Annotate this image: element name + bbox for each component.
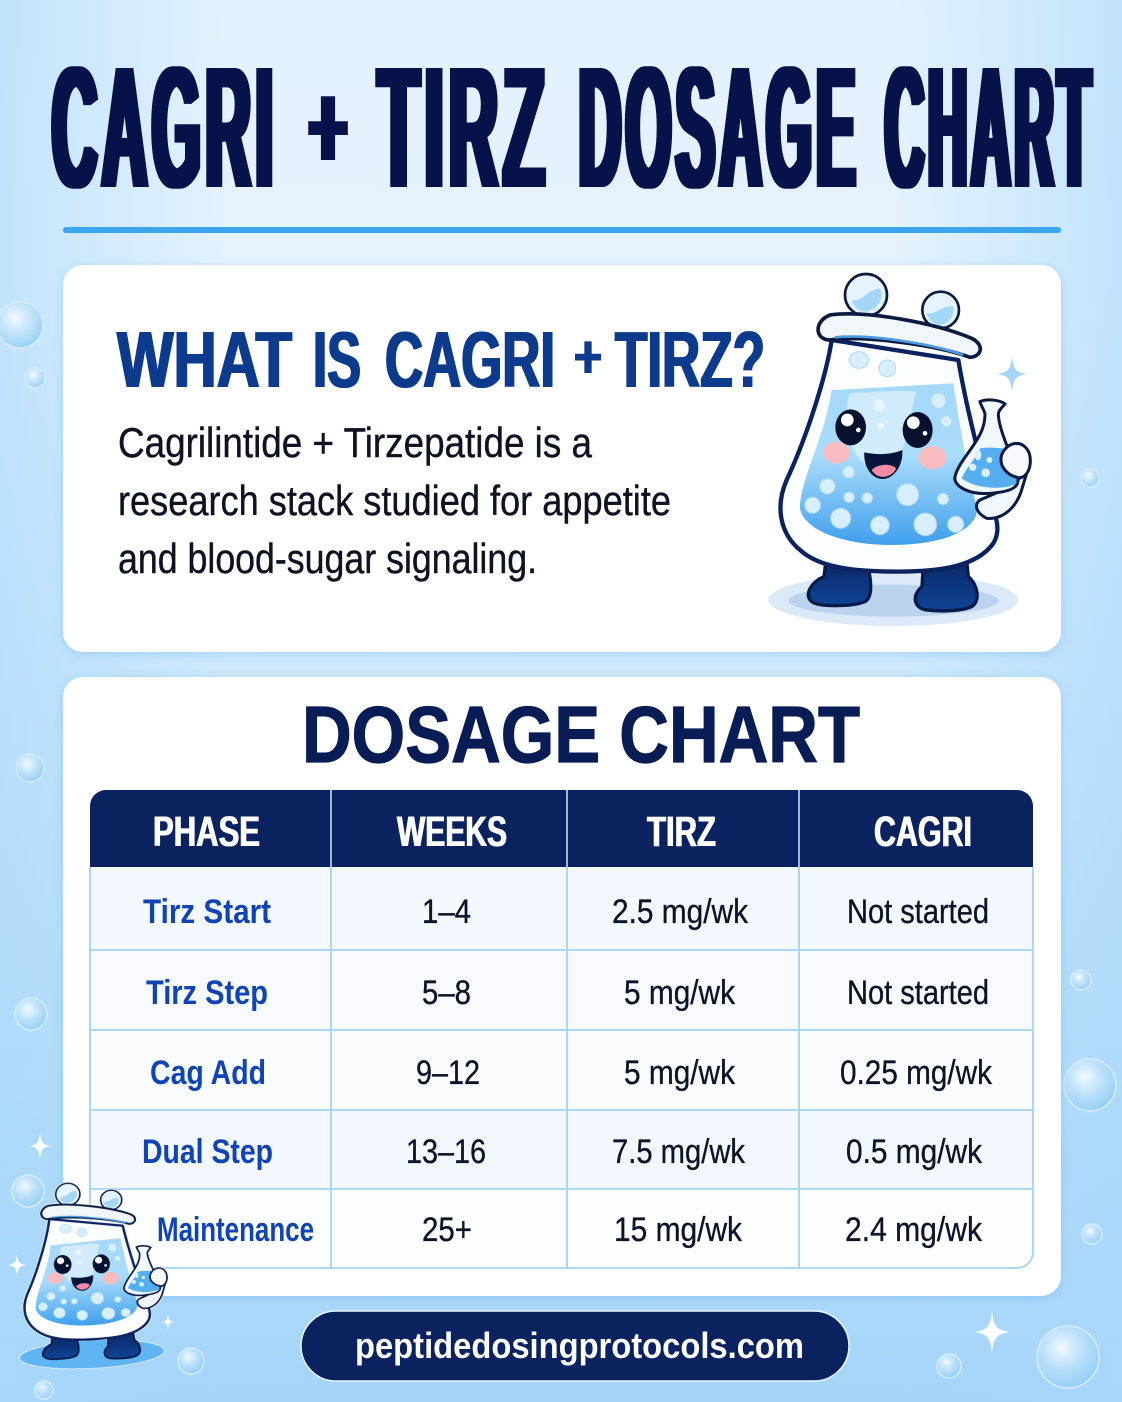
title: TIRZ (378, 30, 550, 224)
row: tirz step: Tirz Step (146, 974, 268, 1012)
heading: what is: + (574, 323, 602, 392)
description text: Cagrilintide + Tirzepatide is a (118, 419, 593, 466)
table rows (90, 867, 1033, 1268)
table header (90, 790, 1033, 867)
title (52, 30, 1095, 224)
heading: what is: WHAT (117, 315, 292, 404)
heading: what is: TIRZ? (615, 315, 765, 404)
icon: sparkle (997, 356, 1027, 392)
row: dual step: 13–16 (406, 1133, 486, 1171)
header labels: TIRZ (647, 808, 716, 856)
small mascot (11, 1178, 172, 1372)
row: cag add: 5 mg/wk (624, 1054, 736, 1092)
row: cag add (150, 1054, 993, 1092)
dosage table (90, 790, 1033, 1268)
title: CAGRI (52, 30, 278, 224)
heading: dosage chart: DOSAGE CHART (302, 690, 860, 779)
icon: small flask (11, 1178, 172, 1372)
description text (118, 419, 671, 582)
row: cag add: Cag Add (150, 1054, 266, 1092)
icon: flask mascot (768, 274, 1030, 626)
row: tirz step: 5–8 (422, 974, 471, 1012)
row: dual step: Dual Step (142, 1133, 273, 1171)
panel: dosage chart (63, 677, 1061, 1296)
sparkles (8, 1133, 1010, 1353)
row: cag add: 0.25 mg/wk (840, 1054, 993, 1092)
row: dual step: 7.5 mg/wk (612, 1133, 746, 1171)
row: tirz start: Tirz Start (143, 893, 271, 931)
row: maintenance (157, 1211, 983, 1249)
row: tirz start: 1–4 (422, 893, 471, 931)
row: tirz step (146, 974, 989, 1012)
heading: what is (117, 315, 765, 404)
header labels: PHASE (153, 808, 260, 856)
row: maintenance: 15 mg/wk (614, 1211, 743, 1249)
header labels: WEEKS (397, 808, 507, 856)
row: tirz start (143, 893, 989, 931)
row: cag add: 9–12 (416, 1054, 480, 1092)
decorative bubbles (0, 302, 1116, 1399)
header labels (153, 808, 972, 856)
heading: what is: IS (313, 315, 361, 404)
website pill (301, 1311, 849, 1381)
header labels: CAGRI (874, 808, 972, 856)
row: tirz step: Not started (847, 974, 989, 1012)
row: tirz start: Not started (847, 893, 989, 931)
title divider (63, 227, 1061, 233)
row: maintenance: Maintenance (157, 1211, 314, 1249)
title: + (309, 58, 347, 197)
row: tirz start: 2.5 mg/wk (612, 893, 749, 931)
row: dual step (142, 1133, 983, 1171)
row: maintenance: 25+ (422, 1211, 472, 1249)
description text: research stack studied for appetite (118, 477, 671, 524)
heading: what is: CAGRI (385, 315, 555, 404)
panel: what is cagri + tirz (63, 265, 1061, 652)
row: maintenance: 2.4 mg/wk (845, 1211, 983, 1249)
row: dual step: 0.5 mg/wk (846, 1133, 983, 1171)
row: tirz step: 5 mg/wk (624, 974, 736, 1012)
website pill: peptidedosingprotocols.com (355, 1325, 804, 1366)
description text: and blood-sugar signaling. (118, 535, 537, 582)
